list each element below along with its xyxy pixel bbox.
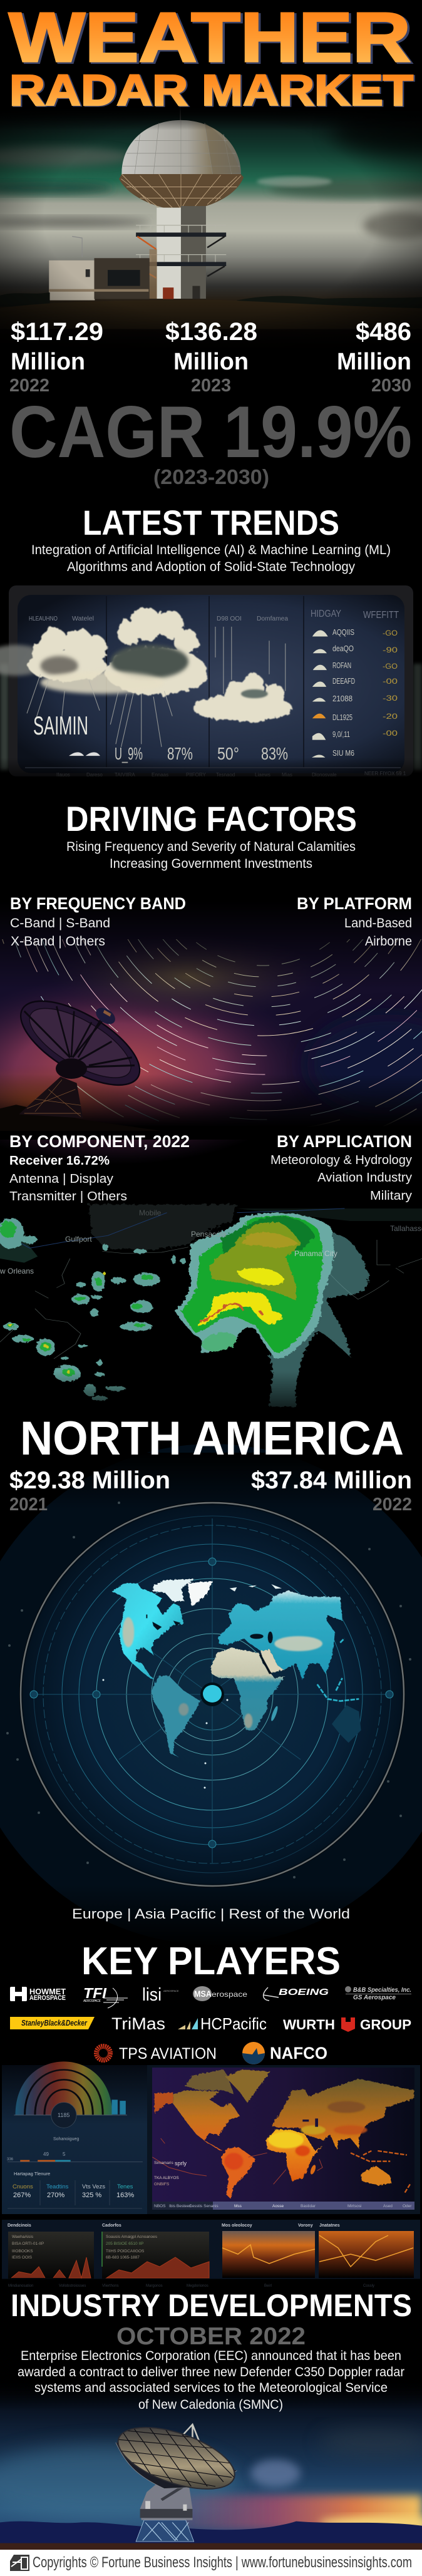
left gauge panel: Vts Vezs xyxy=(82,2183,105,2190)
dashboard labels: Dareso xyxy=(86,772,103,778)
bottom chart cards: WaehaAisis xyxy=(12,2235,34,2239)
bottom chart cards: IEIIS OOIS xyxy=(12,2255,33,2260)
title: RADAR MARKET xyxy=(9,66,413,115)
stat: 2030 market size: $486 xyxy=(356,318,411,346)
segment: by frequency band: X-Band | Others xyxy=(11,934,105,949)
logo: TFI Aerospace: AEROSPACE xyxy=(83,1999,101,2003)
logo: LISI xyxy=(142,1985,179,2005)
footer logo xyxy=(10,2555,29,2571)
stat: north america 2022 xyxy=(251,1467,412,1515)
heat map panel: Oder xyxy=(403,2204,412,2208)
dashboard labels: 9,0/,11 xyxy=(332,729,350,739)
segment: by frequency band xyxy=(10,894,186,949)
logo: NAFCO: NAFCO xyxy=(270,2044,327,2063)
segment: by application: BY APPLICATION xyxy=(277,1132,412,1151)
segment: by component xyxy=(9,1132,190,1203)
map place labels xyxy=(0,1208,422,1275)
logo: LISI: lisi xyxy=(142,1985,162,2005)
bottom chart cards: TIIHS POIDCAIIGOS xyxy=(106,2249,145,2254)
dashboard labels: -00 xyxy=(383,729,398,738)
stat: 2022 market size: Million xyxy=(11,349,85,375)
CAGR: (2023-2030) xyxy=(153,465,269,488)
driving factors text: Increasing Government Investments xyxy=(110,857,312,871)
left gauge panel: Sohanoigueg xyxy=(53,2137,79,2141)
heat map panel: Ibis Besteen xyxy=(169,2204,192,2208)
stat: north america 2021: $29.38 Million xyxy=(9,1467,170,1494)
bottom chart cards: Margonos xyxy=(146,2284,163,2288)
latest trends text: Integration of Artificial Intelligence (AI) & Machine Learning (ML) xyxy=(31,543,391,557)
analytics dashboard xyxy=(0,2061,422,2288)
photo: radar dish with star trails xyxy=(0,919,422,1158)
logo: MSA Aerospace xyxy=(193,1986,247,2001)
latest trends text: Algorithms and Adoption of Solid-State Technology xyxy=(67,560,355,574)
bottom chart cards: Vlierthons xyxy=(102,2284,119,2288)
development text xyxy=(18,2349,404,2412)
dashboard labels: Mias xyxy=(282,772,292,778)
stat: 2022 market size: 2022 xyxy=(9,376,49,396)
dashboard labels: IIauos xyxy=(56,772,70,778)
bottom chart cards: Soausis Amaigpl Acnoanoes xyxy=(106,2235,158,2239)
dashboard labels: -30 xyxy=(383,694,398,703)
map place labels: Panama City xyxy=(294,1249,337,1258)
dashboard labels: TAIVIIRA xyxy=(115,772,135,778)
stat: north america 2022: $37.84 Million xyxy=(251,1467,412,1494)
map place labels: Pensacola xyxy=(191,1230,226,1239)
left gauge panel: 163% xyxy=(116,2192,134,2199)
logo: Wurth Group: WURTH xyxy=(283,2017,335,2032)
heat map panel: Mss xyxy=(234,2204,242,2208)
dashboard labels: -20 xyxy=(383,712,398,721)
heat map panel: Mirtsosi xyxy=(347,2204,361,2208)
radar precipitation map xyxy=(0,1204,422,1409)
dashboard labels: HIDGAY xyxy=(311,609,341,619)
continents xyxy=(111,1579,361,1757)
segment: by component: BY COMPONENT, 2022 xyxy=(9,1132,190,1151)
weather dashboard panel xyxy=(0,585,422,795)
left gauge panel: Teadtins xyxy=(46,2183,69,2190)
heat map panel: Bastidar xyxy=(301,2204,316,2208)
bottom chart cards: Vollobstroiosses xyxy=(59,2284,86,2288)
stat: north america 2022: 2022 xyxy=(373,1495,412,1515)
heat map panel: NBOS xyxy=(154,2204,166,2208)
logo: NAFCO xyxy=(242,2042,327,2064)
logo: Howmet Aerospace: AEROSPACE xyxy=(29,1994,66,2002)
logo: Stanley Black & Decker xyxy=(10,2017,95,2029)
stat: 2022 market size xyxy=(9,318,103,396)
left gauge panel: 325 % xyxy=(82,2192,101,2199)
segment: by platform: Land-Based xyxy=(344,916,412,930)
bottom chart cards: Beirl xyxy=(264,2284,272,2288)
logo: Howmet Aerospace xyxy=(10,1987,66,2002)
heading: key players: KEY PLAYERS xyxy=(81,1940,341,1983)
title xyxy=(9,0,414,115)
left gauge panel: 270% xyxy=(47,2192,64,2199)
hero photo: radar tower xyxy=(0,105,422,357)
logo: TFI Aerospace: TFI xyxy=(83,1985,107,2001)
segment: by application: Military xyxy=(370,1189,412,1203)
bottom chart cards: Mos oleolocoy xyxy=(222,2223,252,2228)
logo: HC Pacific: HCPacific xyxy=(200,2014,267,2033)
dashboard labels: 50° xyxy=(217,744,239,763)
logo: MSA Aerospace: MSA xyxy=(194,1989,212,1999)
other regions: Europe | Asia Pacific | Rest of the World xyxy=(72,1906,350,1922)
map place labels: w Orleans xyxy=(0,1267,34,1275)
left gauge panel xyxy=(2,2061,147,2214)
left gauge panel: 49 xyxy=(43,2151,49,2157)
dashboard labels: ROFAN xyxy=(332,661,351,670)
footer xyxy=(0,2550,422,2576)
dashboard labels: Tesnaod xyxy=(216,772,235,778)
heat map panel: Ased xyxy=(383,2204,393,2208)
dashboard labels: 87% xyxy=(167,744,193,763)
dashboard labels: Ennaas xyxy=(152,772,168,778)
left gauge panel: 5 xyxy=(63,2151,66,2157)
dashboard labels: U_9% xyxy=(115,744,143,763)
segment: by platform: Airborne xyxy=(365,934,412,949)
segment: by application: Meteorology & Hydrology xyxy=(270,1153,412,1167)
storm fringe xyxy=(269,1232,369,1407)
driving factors text: Rising Frequency and Severity of Natural Calamities xyxy=(66,840,356,854)
stat: 2022 market size: $117.29 xyxy=(11,318,103,346)
dashboard labels: Domfamea xyxy=(257,616,288,622)
bottom chart cards: IIIOBOOKS xyxy=(12,2249,33,2254)
radar dish silhouette xyxy=(0,984,162,1131)
bottom chart cards: BISA ORTI-01-IIP xyxy=(12,2242,44,2246)
dashboard labels: -GO xyxy=(383,629,398,637)
left gauge panel: 1185 xyxy=(58,2112,69,2118)
stat: 2030 market size xyxy=(337,318,411,396)
left gauge panel: Cnuons xyxy=(13,2183,33,2190)
logo: B&B Specialties / GS Aerospace xyxy=(345,1986,411,2001)
stat: 2030 market size: Million xyxy=(337,349,411,375)
heat map panel xyxy=(152,2068,414,2210)
clouds xyxy=(0,607,328,758)
logo: TriMas: TriMas xyxy=(111,2014,165,2033)
dashboard labels: Liaews xyxy=(255,772,270,778)
dashboard labels: DEEAFD xyxy=(332,676,355,686)
left gauge panel: Hartapag Tlenure xyxy=(14,2171,50,2177)
logo: B&B Specialties / GS Aerospace: B&B Specialties, Inc. xyxy=(353,1986,411,1994)
logo: Stanley Black & Decker: StanleyBlack&Decker xyxy=(21,2019,88,2027)
photo: radio telescope at dusk xyxy=(0,2379,422,2552)
segment: by application xyxy=(270,1132,412,1203)
development text: Enterprise Electronics Corporation (EEC) announced that it has been xyxy=(21,2349,401,2363)
dashboard labels: 21088 xyxy=(332,694,353,703)
dashboard labels: -GO xyxy=(383,662,398,671)
bottom chart cards: 205 BISIOE 6510 IIP xyxy=(106,2242,143,2246)
logo: TFI Aerospace xyxy=(83,1985,128,2008)
segment: by component: Transmitter | Others xyxy=(9,1190,127,1203)
stat: north america 2021: 2021 xyxy=(9,1495,48,1515)
bottom chart cards: Megdorionos xyxy=(187,2284,208,2288)
heat map panel: Cesstis Senanis xyxy=(189,2204,219,2208)
radar tower xyxy=(0,107,422,329)
radar world map xyxy=(0,1444,422,1947)
segment: by platform: BY PLATFORM xyxy=(297,894,412,913)
map place labels: Mobile xyxy=(139,1208,162,1217)
dashboard labels: AQQIIS xyxy=(332,627,354,637)
logo: TPS Aviation: TPS AVIATION xyxy=(119,2045,217,2063)
star trails xyxy=(2,939,422,1125)
stat: 2030 market size: 2030 xyxy=(371,376,411,396)
dashboard labels: -90 xyxy=(383,646,398,654)
dashboard labels: WFEFITT xyxy=(363,610,399,621)
dashboard labels: PIIFORY xyxy=(186,772,207,778)
title: RADAR MARKET xyxy=(11,66,414,115)
logos xyxy=(10,1985,411,2064)
logo: Wurth Group: GROUP xyxy=(360,2017,411,2032)
title: WEATHER xyxy=(11,0,413,78)
dashboard labels xyxy=(29,609,406,778)
logo: B&B Specialties / GS Aerospace: GS Aerospace xyxy=(353,1994,396,2001)
logo: Boeing xyxy=(263,1987,329,2001)
segment: by application: Aviation Industry xyxy=(317,1171,412,1185)
bottom chart cards: Vorony xyxy=(298,2223,313,2228)
logo: LISI: AEROSPACE xyxy=(163,1989,179,1992)
segment: by frequency band: C-Band | S-Band xyxy=(10,916,110,930)
title: WEATHER xyxy=(9,0,411,76)
stat: 2023 market size: Million xyxy=(173,349,249,375)
segment: by component: Antenna | Display xyxy=(9,1172,113,1186)
heading: latest trends: LATEST TRENDS xyxy=(83,503,339,542)
development text: systems and associated services to the Meteorological Service xyxy=(34,2381,388,2395)
left gauge panel: 336 xyxy=(7,2158,14,2161)
segment: by frequency band: BY FREQUENCY BAND xyxy=(10,894,186,913)
heat map panel: GNBIFS xyxy=(154,2182,170,2187)
left gauge panel: Tenes xyxy=(117,2183,133,2190)
main storm xyxy=(175,1213,334,1359)
heat map panel: Aosse xyxy=(272,2204,284,2208)
dashboard labels: HLEAUHNO xyxy=(29,616,58,622)
heat map panel: sprly xyxy=(175,2160,187,2166)
latest trends text xyxy=(31,543,391,574)
development text: awarded a contract to deliver three new Defender C350 Doppler radar xyxy=(18,2365,404,2379)
radio telescope xyxy=(0,2414,422,2550)
dashboard labels: NEER FIYOX 59 1 xyxy=(364,771,406,776)
segment: by platform xyxy=(297,894,412,949)
small echoes xyxy=(0,1218,186,1401)
bottom chart cards: 6B-683 1065-1887 xyxy=(106,2255,140,2260)
bottom chart cards xyxy=(0,2220,422,2288)
dashboard labels: SIU M6 xyxy=(332,748,354,758)
bottom chart cards: Jnatatnes xyxy=(319,2223,340,2228)
date: OCTOBER 2022 xyxy=(116,2323,306,2350)
dashboard labels: 83% xyxy=(261,744,288,763)
dashboard labels: Watelel xyxy=(72,616,94,622)
logo: Howmet Aerospace: HOWMET xyxy=(29,1987,66,1996)
dashboard labels: SAIMIN xyxy=(33,711,88,740)
bottom chart cards: Mindianosation xyxy=(8,2284,33,2288)
stat: 2023 market size: $136.28 xyxy=(165,318,257,346)
logo: MSA Aerospace: erospace xyxy=(212,1990,247,1999)
dashboard labels: deaQO xyxy=(332,644,354,653)
driving factors text xyxy=(66,840,356,871)
development text: of New Caledonia (SMNC) xyxy=(138,2398,283,2412)
map place labels: Gulfport xyxy=(65,1235,92,1244)
heat map panel: Simamaris xyxy=(154,2161,173,2165)
stat: 2023 market size: 2023 xyxy=(191,376,231,396)
bottom chart cards: Cadorfos xyxy=(102,2223,121,2228)
logo: Boeing: BOEING xyxy=(279,1987,329,1997)
left gauge panel: 267% xyxy=(13,2192,31,2199)
segment: by component: Receiver 16.72% xyxy=(9,1154,110,1168)
stat: 2023 market size xyxy=(165,318,257,396)
logo: Wurth Group xyxy=(283,2017,411,2032)
dashboard labels: -00 xyxy=(383,677,398,686)
heading: driving factors: DRIVING FACTORS xyxy=(66,799,357,838)
dashboard labels: D98 OOI xyxy=(217,616,242,622)
bottom chart cards: Dendcinois xyxy=(8,2223,31,2228)
dashboard labels: DL1925 xyxy=(332,713,353,722)
heat map panel: TKA ALBYOS xyxy=(154,2176,179,2180)
bottom chart cards: Cossly xyxy=(363,2284,374,2288)
heading: north america: NORTH AMERICA xyxy=(20,1412,404,1465)
stat: north america 2021 xyxy=(9,1467,170,1515)
dashboard labels: Dlonosvale xyxy=(312,772,337,778)
